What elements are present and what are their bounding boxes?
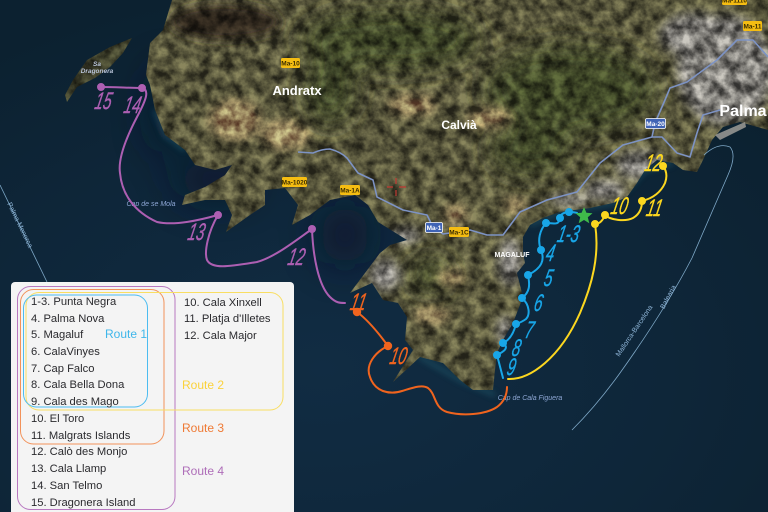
legend list: route 2 stops <box>184 297 271 342</box>
route 3 stop numbers: 10 <box>387 344 410 370</box>
motorways <box>298 40 768 235</box>
road sign: Ma-20 <box>646 118 666 128</box>
route 2 stop numbers <box>608 151 665 222</box>
route 4 stop numbers: 12 <box>285 245 308 271</box>
shallow water glow along coast <box>155 110 673 395</box>
shaded coastal water <box>152 65 370 265</box>
route 4 stop numbers <box>92 89 308 271</box>
dry terraces <box>209 95 527 323</box>
legend list: stops 1 to 15: 9. Cala des Mago <box>31 396 119 408</box>
icon: red crosshair <box>387 178 406 196</box>
route 4 stop numbers: 14 <box>121 93 144 119</box>
road sign: Ma-1020: Ma-1020 <box>282 180 308 186</box>
legend box: route 4 outline <box>18 286 175 510</box>
route 2: yellow line <box>508 163 666 379</box>
road sign: Ma-1020 <box>282 177 308 187</box>
road sign: Ma-1A: Ma-1A <box>340 188 360 194</box>
place label: Palma: Palma <box>719 103 767 120</box>
route 3 stop numbers: 11 <box>348 290 369 316</box>
route 3: orange line <box>354 309 507 414</box>
route 1 stop numbers <box>505 222 583 381</box>
road sign: Ma-20: Ma-20 <box>646 121 665 128</box>
legend list: stops 1 to 15: 5. Magaluf <box>31 329 84 341</box>
route 1 stop numbers: 7 <box>523 318 537 344</box>
Palma port <box>715 122 746 140</box>
place label: Calvià: Calvià <box>441 118 477 132</box>
legend box: route 3 outline <box>20 290 164 444</box>
road sign: Ma-1A <box>340 185 360 195</box>
place label: Magaluf: MAGALUF <box>494 252 530 259</box>
road sign: Ma-11: Ma-11 <box>743 24 762 30</box>
route 1 stop numbers: 5 <box>542 266 556 292</box>
legend list: stops 1 to 15: 10. El Toro <box>31 413 84 425</box>
route 2 stop numbers: 10 <box>608 194 631 220</box>
legend list: stops 1 to 15: 11. Malgrats Islands <box>31 430 131 442</box>
legend list: stops 1 to 15: 4. Palma Nova <box>31 313 105 325</box>
route 1 stop numbers: 6 <box>532 291 546 317</box>
road sign: Ma-1C: Ma-1C <box>449 230 469 236</box>
route 1 stop numbers: 4 <box>544 241 557 267</box>
legend label: Route 1: Route 1 <box>105 327 147 341</box>
legend list: stops 1 to 15: 14. San Telmo <box>31 480 102 492</box>
legend list: stops 1 to 15: 8. Cala Bella Dona <box>31 379 125 391</box>
legend list: stops 1 to 15: 15. Dragonera Island <box>31 497 135 509</box>
road sign: Ma-1: Ma-1 <box>427 225 442 232</box>
land: Mallorca south-west <box>146 0 768 390</box>
legend label: Route 4: Route 4 <box>182 464 224 478</box>
route 2 stop numbers: 12 <box>642 151 665 177</box>
legend list: route 2 stops: 11. Platja d'Illetes <box>184 313 271 325</box>
legend label: Route 2: Route 2 <box>182 378 224 392</box>
cape label: Cap de se Mola: Cap de se Mola <box>126 201 176 208</box>
legend list: stops 1 to 15: 6. CalaVinyes <box>31 346 100 358</box>
route 1 stop numbers: 9 <box>505 355 518 381</box>
legend list: stops 1 to 15: 1-3. Punta Negra <box>31 296 117 308</box>
route 1: blue line <box>494 209 577 378</box>
legend list: stops 1 to 15 <box>31 296 135 509</box>
road sign: Ma-1C <box>449 227 469 237</box>
legend list: stops 1 to 15: 13. Cala Llamp <box>31 463 106 475</box>
ferry label: Balearia: Balearia <box>660 284 678 310</box>
route 1 stop numbers: 1-3 <box>555 222 583 248</box>
place label: Sa Dragonera: Dragonera <box>81 68 114 75</box>
route 4: purple line <box>98 84 345 303</box>
urban areas <box>369 13 768 344</box>
road sign: Ma-10 <box>281 58 300 68</box>
cape label: Cap de Cala Figuera: Cap de Cala Figuera <box>498 395 562 402</box>
road sign: Ma-10: Ma-10 <box>281 60 300 68</box>
dark forested highlands <box>300 10 655 291</box>
route 4 stop numbers: 13 <box>185 220 208 246</box>
place label: Andratx: Andratx <box>272 83 322 98</box>
road sign: Ma-1 <box>426 222 442 232</box>
ferry label: Palma-Menorca: Palma-Menorca <box>5 202 33 249</box>
route 4 stop numbers: 15 <box>92 89 115 115</box>
fine terrain texture <box>146 0 768 390</box>
route 2 stop numbers: 11 <box>644 196 665 222</box>
legend label: Route 3: Route 3 <box>182 421 224 435</box>
legend box: route 1 outline <box>24 295 148 407</box>
ferry label: Mallorca-Barcelona: Mallorca-Barcelona <box>615 304 655 358</box>
legend list: stops 1 to 15: 7. Cap Falco <box>31 363 94 375</box>
dark mountain crest <box>170 4 280 40</box>
legend list: route 2 stops: 10. Cala Xinxell <box>184 297 262 309</box>
panel: legend <box>11 282 294 512</box>
ferry lines <box>0 146 733 430</box>
legend box: route 2 outline <box>26 292 283 410</box>
land: Sa Dragonera island <box>65 38 132 102</box>
route 1 stop numbers: 8 <box>510 336 524 362</box>
icon: green star start point <box>576 207 592 223</box>
legend list: stops 1 to 15: 12. Calò des Monjo <box>31 446 127 458</box>
route 3 stop numbers <box>348 290 410 370</box>
road sign: Ma-11 <box>743 21 762 31</box>
legend list: route 2 stops: 12. Cala Major <box>184 330 257 342</box>
place label: Sa Dragonera: Sa <box>93 61 101 68</box>
